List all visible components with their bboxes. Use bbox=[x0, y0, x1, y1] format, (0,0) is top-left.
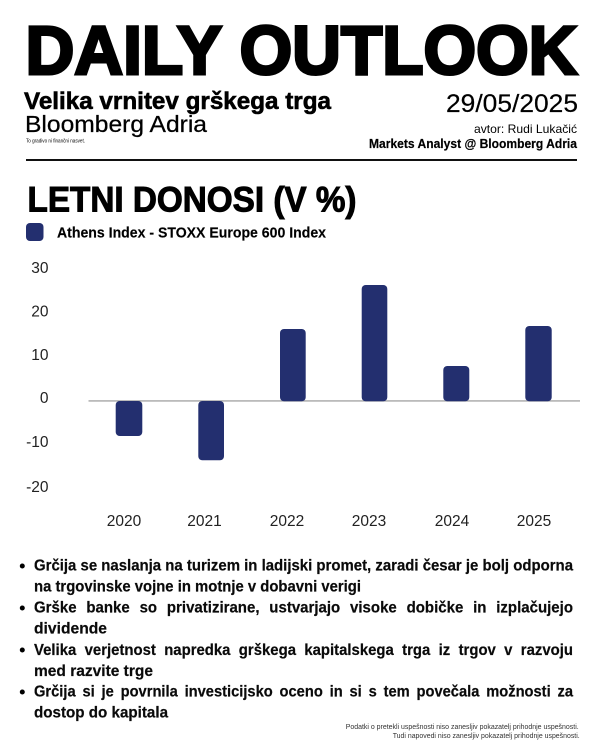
chart heading: LETNI DONOSI (V %) bbox=[28, 180, 356, 220]
tagline: To gradivo ni finančni nasvet. bbox=[26, 139, 85, 145]
title: DAILY OUTLOOK bbox=[26, 12, 578, 89]
y axis labels bbox=[26, 260, 49, 496]
author: avtor: Rudi Lukačić bbox=[474, 122, 577, 136]
bullet 2 bbox=[20, 600, 573, 638]
brand name: Bloomberg Adria bbox=[25, 111, 207, 137]
bullet 2: dividende bbox=[34, 620, 107, 638]
bullet 3: med razvite trge bbox=[34, 663, 153, 680]
bullet 4: dostop do kapitala bbox=[34, 704, 168, 722]
disclaimer: Podatki o pretekli uspešnosti niso zanesljiv pokazatelj prihodnje uspešnosti. bbox=[346, 724, 579, 731]
subtitle: Velika vrnitev grškega trga bbox=[24, 88, 331, 115]
bullet 4 bbox=[20, 684, 573, 722]
zero line bbox=[88, 400, 580, 402]
y axis labels: 20 bbox=[31, 304, 49, 321]
author role: Markets Analyst @ Bloomberg Adria bbox=[369, 136, 578, 151]
bullet 3: Velika verjetnost napredka grškega kapitalskega trga iz trgov v razvoju bbox=[34, 642, 573, 659]
x axis labels: 2020 bbox=[107, 513, 142, 530]
bars bbox=[116, 285, 552, 460]
legend swatch bbox=[26, 223, 44, 241]
x axis labels: 2021 bbox=[187, 513, 222, 530]
x axis labels bbox=[107, 513, 551, 530]
bullet 1: Grčija se naslanja na turizem in ladijski promet, zaradi česar je bolj odporna bbox=[34, 558, 573, 574]
y axis labels: 0 bbox=[40, 390, 49, 407]
disclaimer bbox=[346, 724, 580, 740]
legend bbox=[26, 223, 326, 242]
header rule bbox=[26, 159, 577, 161]
bullet list bbox=[20, 558, 573, 722]
bullet 1 bbox=[20, 558, 573, 596]
x axis labels: 2025 bbox=[517, 513, 551, 530]
bullet 2: Grške banke so privatizirane, ustvarjajo visoke dobičke in izplačujejo bbox=[34, 600, 573, 616]
bullet 3 bbox=[20, 642, 573, 680]
x axis labels: 2022 bbox=[270, 513, 304, 530]
y axis labels: -20 bbox=[26, 479, 49, 496]
y axis labels: 10 bbox=[31, 347, 49, 364]
legend label: Athens Index - STOXX Europe 600 Index bbox=[57, 226, 326, 242]
x axis labels: 2023 bbox=[352, 513, 386, 530]
y axis labels: 30 bbox=[31, 260, 49, 277]
disclaimer: Tudi napovedi niso zanesljiv pokazatelj prihodnje uspešnosti. bbox=[393, 733, 580, 740]
date: 29/05/2025 bbox=[446, 90, 578, 118]
y axis labels: -10 bbox=[26, 434, 49, 451]
x axis labels: 2024 bbox=[435, 513, 470, 530]
bar chart bbox=[26, 260, 580, 530]
bullet 1: na trgovinske vojne in motnje v dobavni verigi bbox=[34, 578, 361, 596]
